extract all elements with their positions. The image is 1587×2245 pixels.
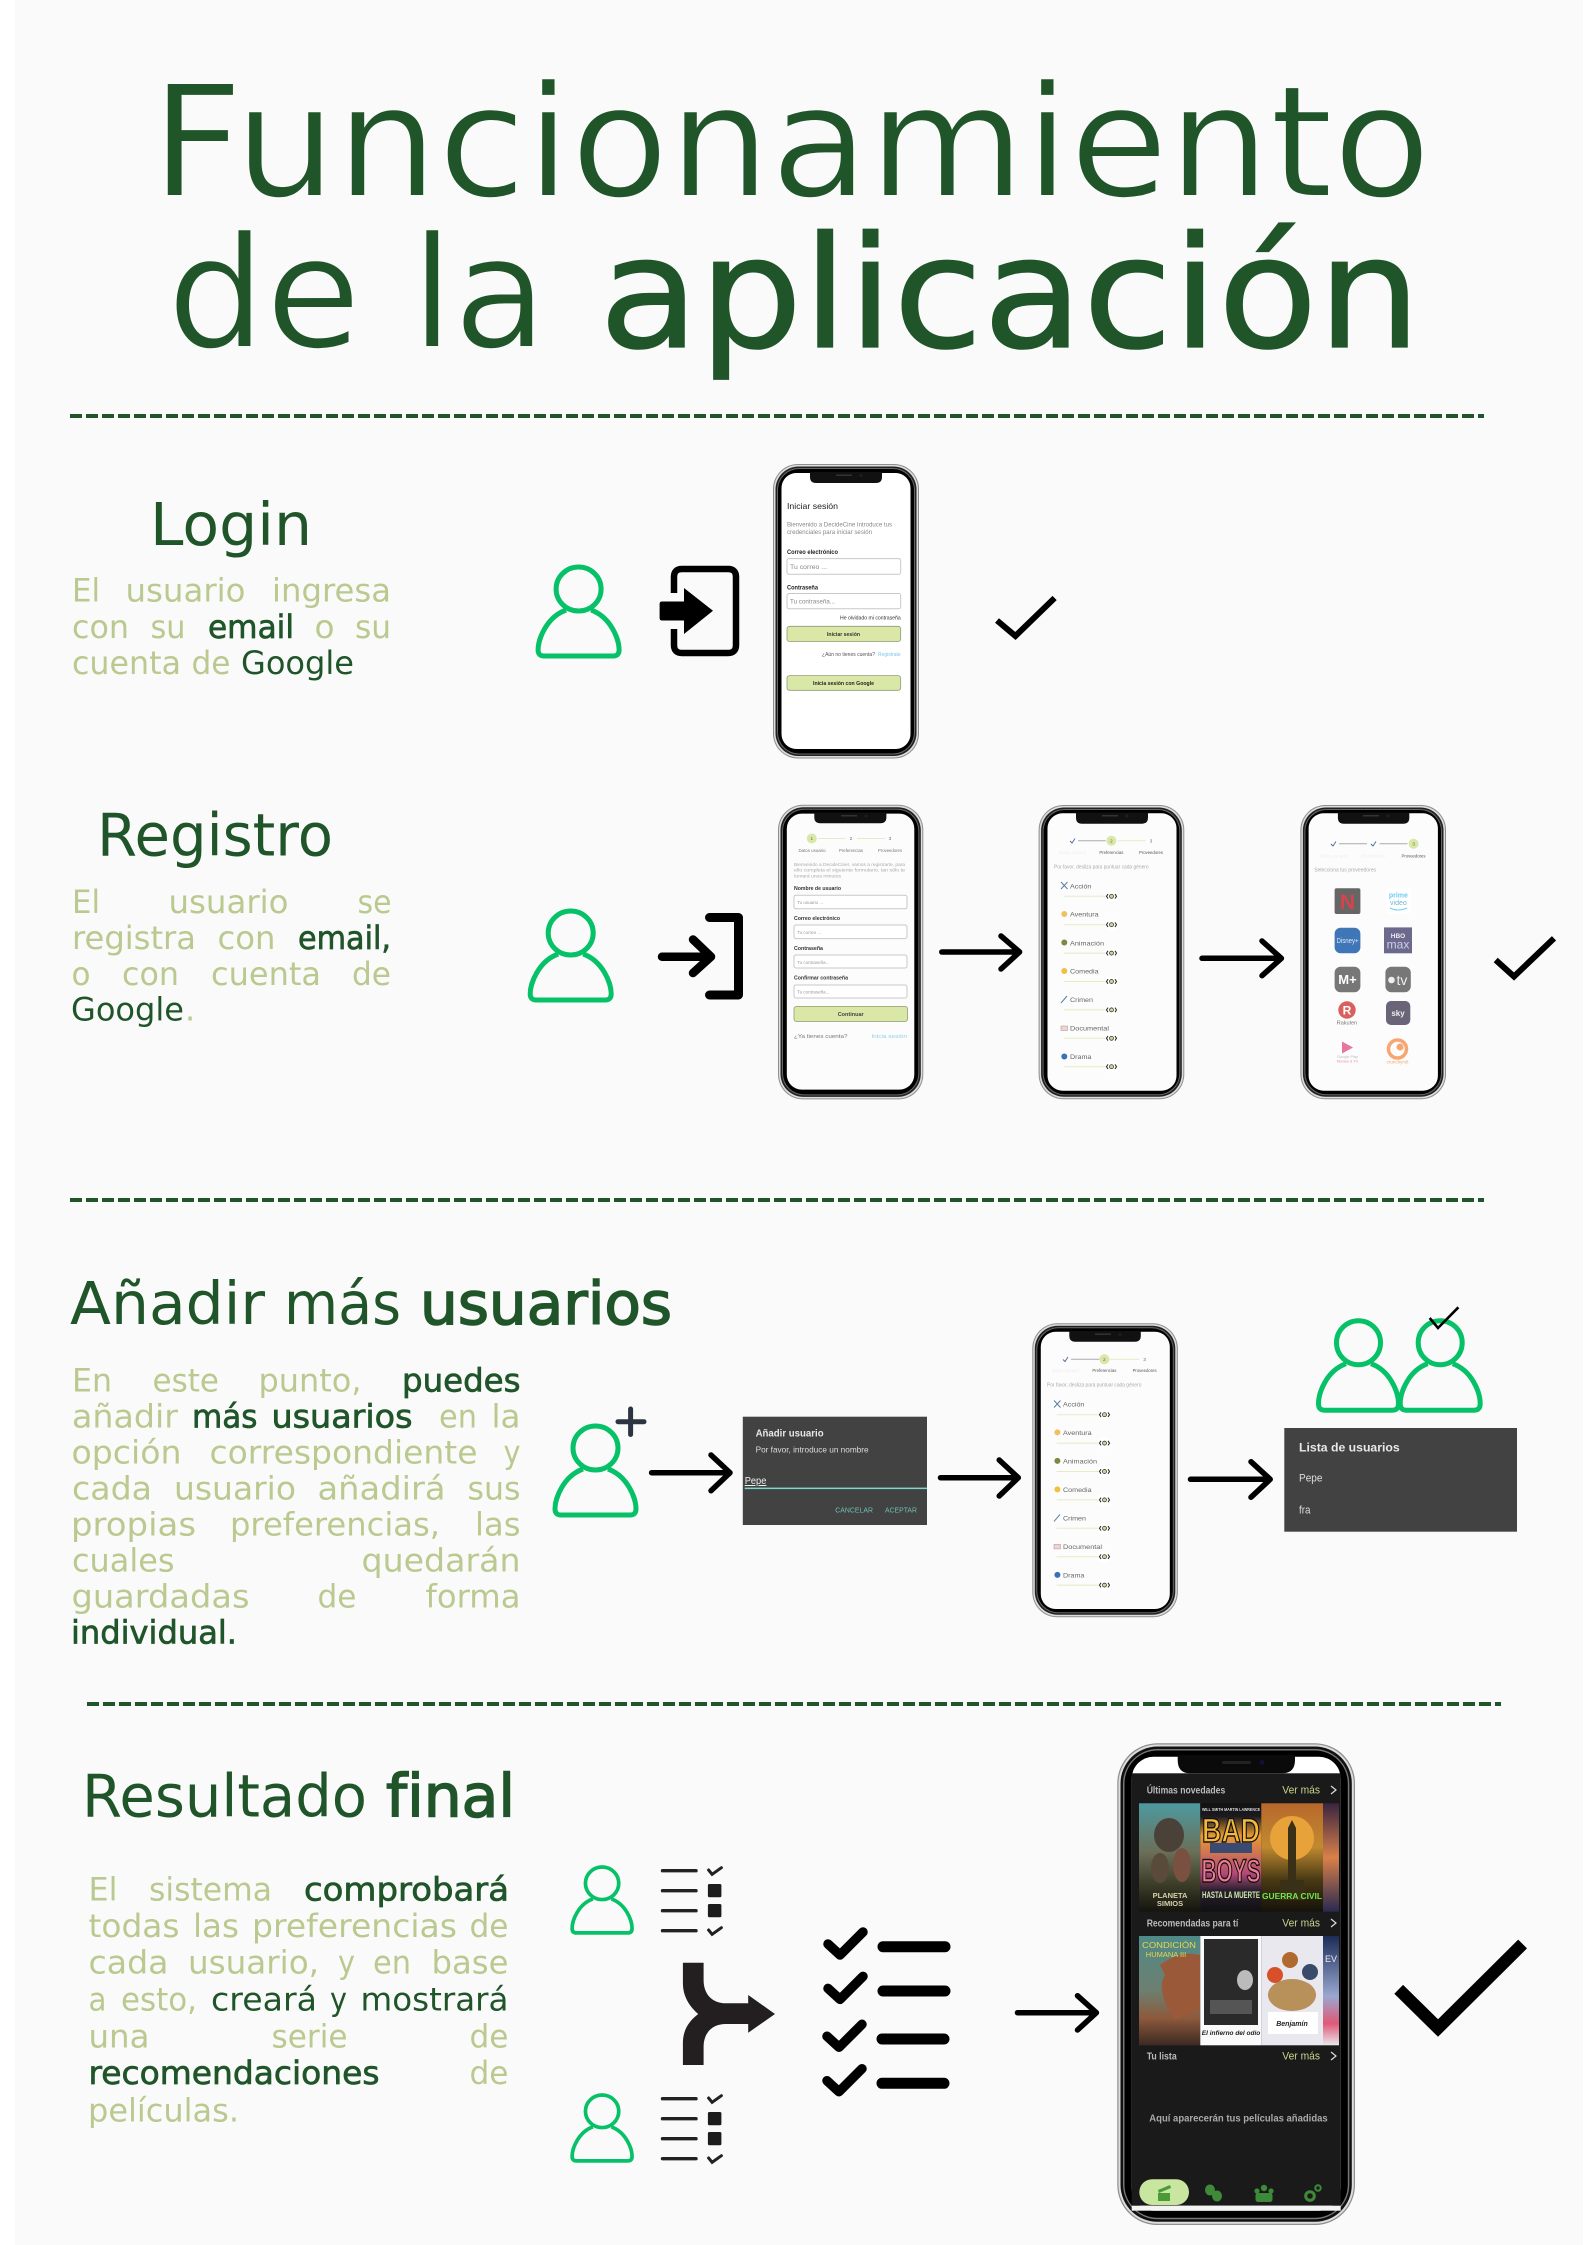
phone: preferencias: Datos usuario — [1059, 850, 1086, 855]
phone: proveedores: Google Play — [1337, 1055, 1358, 1059]
text block: login description — [72, 572, 391, 682]
text block: resultado description: creará — [211, 1980, 317, 2018]
phone: datos de usuario: Bienvenido a DecideCine!, vamos a registrarte, para — [794, 862, 906, 867]
text block: resultado description: recomendaciones — [88, 2054, 380, 2092]
text block: login description: su — [150, 608, 186, 646]
text block: resultado description: preferencias — [252, 1907, 457, 1945]
heading: añadir más usuarios: más — [284, 1269, 401, 1338]
section row: últimas novedades: Ver más — [1282, 2050, 1320, 2062]
text block: registro description: con — [122, 955, 179, 993]
panel: login — [72, 464, 1055, 758]
phone: proveedores: M+ — [1338, 972, 1357, 987]
text block: resultado description: a — [88, 1980, 106, 2018]
phone: datos de usuario: Tu correo ... — [797, 930, 821, 935]
phone: preferencias nuevo usuario: Documental — [1063, 1544, 1103, 1551]
phone: preferencias: 2 — [1110, 838, 1113, 843]
text block: login description: usuario — [126, 572, 246, 610]
phone: proveedores: Movies & TV — [1337, 1060, 1359, 1064]
text block: añadir description: correspondiente — [210, 1433, 478, 1471]
section row: últimas novedades: HUMANA III — [1146, 1950, 1186, 1959]
arrow — [940, 1460, 1018, 1496]
phone: preferencias: Comedia — [1070, 969, 1099, 976]
text block: añadir description: punto, — [258, 1362, 362, 1400]
phone: preferencias nuevo usuario: 3 — [1143, 1357, 1146, 1362]
title: Funcionamiento — [151, 52, 1431, 233]
phone: preferencias: Crimen — [1070, 997, 1093, 1004]
text block: registro description: cuenta — [211, 955, 321, 993]
phone: proveedores: N — [1340, 891, 1355, 914]
phone: login screen: Bienvenido a DecideCine Introduce tus — [787, 523, 892, 529]
heading: añadir más usuarios: usuarios — [420, 1269, 672, 1338]
phone: datos de usuario: ello completa el siguiente formulario, tan sólo te — [794, 868, 906, 873]
phone: preferencias: 3 — [1150, 838, 1153, 843]
icon: add user — [555, 1409, 644, 1515]
phone: datos de usuario: Tu contraseña... — [797, 960, 829, 965]
text block: añadir description: la — [492, 1398, 520, 1436]
panel: registro — [71, 800, 1554, 1099]
icon: user with preferences (bottom) — [572, 2095, 721, 2162]
text block: resultado description: todas — [88, 1907, 180, 1945]
phone: login screen: Contraseña — [787, 585, 819, 591]
icon: check — [1496, 938, 1554, 976]
panel: lista de usuarios: fra — [1299, 1504, 1311, 1516]
title: la — [411, 203, 547, 384]
heading: resultado final: final — [386, 1762, 515, 1830]
text block: registro description: se — [358, 883, 392, 921]
arrow — [652, 1455, 730, 1491]
phone: preferencias nuevo usuario: Por favor, desliza para puntuar cada género — [1047, 1383, 1142, 1389]
text block: añadir description: preferencias, — [230, 1505, 440, 1543]
icon: log in — [660, 569, 736, 653]
phone: proveedores: sky — [1391, 1009, 1405, 1018]
text block: añadir description: añadirá — [318, 1469, 446, 1507]
phone: datos de usuario: Datos usuario — [798, 848, 826, 853]
phone: datos de usuario: Nombre de usuario — [794, 886, 841, 892]
phone: datos de usuario: Tu contraseña... — [797, 989, 829, 994]
section row: últimas novedades: Últimas novedades — [1147, 1783, 1226, 1796]
text block: resultado description: usuario, — [188, 1944, 319, 1982]
phone: preferencias: Proveedores — [1139, 850, 1164, 855]
section row: últimas novedades: SIMIOS — [1157, 1899, 1183, 1908]
heading: login: Login — [150, 490, 312, 559]
text block: resultado description: serie — [272, 2018, 348, 2056]
text block: resultado description: en — [373, 1944, 411, 1982]
phone: proveedores: Preferencias — [1361, 853, 1386, 858]
phone: preferencias — [1039, 805, 1184, 1099]
phone: preferencias: Aventura — [1070, 912, 1099, 919]
text block: login description: ingresa — [272, 572, 391, 610]
phone: datos de usuario: 3 — [889, 836, 892, 841]
phone: datos de usuario: 2 — [850, 836, 853, 841]
section row: últimas novedades — [1132, 1783, 1341, 2211]
phone: preferencias: Animación — [1070, 940, 1104, 947]
phone: proveedores: Selecciona tus proveedores — [1314, 868, 1376, 874]
text block: añadir description: propias — [71, 1505, 196, 1543]
text block: registro description: email, — [298, 919, 391, 957]
phone: proveedores: Disney+ — [1336, 936, 1359, 945]
section row: últimas novedades: Benjamín — [1276, 2021, 1308, 2028]
text block: registro description: usuario — [168, 883, 288, 921]
title: de — [167, 203, 361, 384]
text block: resultado description: de — [470, 2054, 508, 2092]
panel: añadir más usuarios — [70, 1269, 1517, 1651]
text block: resultado description: y — [338, 1944, 355, 1982]
heading: añadir más usuarios: Añadir — [70, 1269, 266, 1338]
phone: preferencias nuevo usuario: Acción — [1063, 1402, 1085, 1409]
panel: lista de usuarios: Lista de usuarios — [1299, 1441, 1400, 1455]
title: aplicación — [599, 203, 1421, 384]
text block: registro description: . — [185, 991, 195, 1029]
phone: datos de usuario: Tu usuario ... — [797, 900, 823, 905]
phone: preferencias nuevo usuario — [1032, 1323, 1178, 1617]
dialog: añadir usuario: Pepe — [745, 1476, 767, 1487]
phone: preferencias nuevo usuario: 2 — [1103, 1357, 1106, 1362]
heading: registro: Registro — [97, 800, 333, 870]
text block: añadir description: sus — [468, 1469, 520, 1507]
section row: recomendadas: Recomendadas para tí — [1147, 1919, 1239, 1930]
text block: añadir description — [71, 1362, 520, 1651]
phone: proveedores: max — [1387, 938, 1409, 952]
section row: últimas novedades: PLANETA — [1153, 1891, 1188, 1900]
text block: registro description: o — [72, 955, 90, 993]
text block: añadir description: más — [192, 1398, 258, 1436]
phone: datos de usuario: Continuar — [838, 1012, 865, 1018]
phone: login screen: Tu contraseña... — [790, 599, 835, 606]
section row: últimas novedades: BOYS — [1202, 1853, 1260, 1889]
phone: datos de usuario: tomará unos minutos — [794, 874, 842, 879]
phone: proveedores: video — [1390, 900, 1407, 907]
phone: login screen: Iniciar sesión — [787, 501, 838, 511]
text block: añadir description: las — [475, 1505, 520, 1543]
arrow — [1190, 1462, 1270, 1497]
phone: datos de usuario: Correo electrónico — [794, 916, 840, 922]
text block: añadir description: este — [152, 1362, 219, 1400]
title — [151, 52, 1431, 384]
icon: user — [538, 567, 619, 656]
phone: preferencias: Drama — [1070, 1054, 1092, 1061]
phone: preferencias: Acción — [1070, 883, 1092, 890]
text block: login description: email — [208, 608, 294, 646]
section row: últimas novedades: Ver más — [1282, 1784, 1320, 1796]
phone: preferencias: Preferencias — [1099, 850, 1124, 855]
icon: user — [530, 911, 611, 1000]
section row: últimas novedades: Aquí aparecerán tus películas añadidas — [1149, 2114, 1328, 2125]
text block: resultado description: cada — [88, 1944, 168, 1982]
phone: proveedores: crunchyroll — [1387, 1060, 1408, 1065]
section row: últimas novedades: CONDICIÓN — [1142, 1941, 1196, 1950]
text block: resultado description: las — [193, 1907, 239, 1945]
dialog: añadir usuario: ACEPTAR — [885, 1506, 918, 1515]
phone: login screen: ¿Aún no tienes cuenta? — [822, 652, 875, 658]
arrow — [1202, 941, 1281, 976]
tab bar — [1139, 2179, 1321, 2205]
phone: login screen: Correo electrónico — [787, 550, 838, 556]
text block: resultado description: de — [470, 2018, 508, 2056]
section row: últimas novedades: El infierno del odio — [1202, 2030, 1260, 2037]
phone: preferencias nuevo usuario: Crimen — [1063, 1515, 1086, 1522]
phone: proveedores: Proveedores — [1402, 853, 1426, 858]
phone: proveedores: 3 — [1412, 841, 1415, 846]
phone: proveedores: R — [1343, 1004, 1352, 1018]
text block: login description: de — [192, 644, 230, 682]
icon: user with preferences (top) — [572, 1867, 721, 1934]
text block: resultado description: sistema — [149, 1870, 272, 1908]
text block: añadir description: individual. — [71, 1613, 237, 1651]
text block: añadir description: guardadas — [72, 1577, 250, 1615]
dialog: añadir usuario: Por favor, introduce un nombre — [756, 1445, 869, 1455]
icon: merge arrow — [683, 1963, 775, 2065]
text block: añadir description: en — [439, 1398, 477, 1436]
section row: tu lista: Tu lista — [1147, 2051, 1177, 2062]
text block: registro description: registra — [72, 919, 196, 957]
arrow — [1018, 1996, 1096, 2030]
phone: datos de usuario: 1 — [811, 836, 814, 841]
text block: resultado description: una — [88, 2018, 150, 2056]
text block: login description: Google — [241, 644, 354, 682]
icon: big check — [1399, 1944, 1523, 2028]
phone: datos de usuario — [778, 805, 923, 1099]
text block: añadir description: cuales — [72, 1541, 174, 1579]
phone: login screen — [773, 464, 919, 758]
panel: lista de usuarios — [1284, 1428, 1517, 1532]
text block: añadir description: quedarán — [362, 1541, 520, 1579]
text block: resultado description: películas. — [88, 2092, 239, 2130]
phone: datos de usuario: Proveedores — [878, 848, 903, 853]
text block: resultado description: comprobará — [304, 1870, 509, 1908]
section row: últimas novedades: HASTA LA MUERTE — [1202, 1890, 1260, 1900]
phone: proveedores: prime — [1389, 892, 1408, 900]
text block: resultado description: esto, — [121, 1980, 197, 2018]
text block: login description: o — [314, 608, 334, 646]
phone: login screen: He olvidado mi contraseña — [840, 616, 901, 622]
panel: lista de usuarios: Pepe — [1299, 1473, 1322, 1485]
phone: final home screen — [1117, 1743, 1523, 2225]
phone: preferencias nuevo usuario: Aventura — [1063, 1430, 1092, 1437]
text block: resultado description: mostrará — [360, 1980, 508, 2018]
phone: login screen: credenciales para iniciar sesión — [787, 530, 872, 536]
text block: login description: cuenta — [72, 644, 181, 682]
text block: añadir description: opción — [72, 1433, 182, 1471]
phone: datos de usuario: Confirmar contraseña — [794, 976, 848, 982]
text block: resultado description: El — [88, 1870, 118, 1908]
phone: proveedores: Datos usuario — [1320, 853, 1347, 858]
phone: datos de usuario: Contraseña — [794, 946, 823, 952]
phone: preferencias nuevo usuario: Datos usuario — [1052, 1368, 1079, 1373]
phone: proveedores: tv — [1397, 972, 1407, 988]
phone: datos de usuario: ¿Ya tienes cuenta? — [794, 1034, 848, 1040]
section row: últimas novedades: WILL SMITH MARTIN LAWRENCE — [1202, 1807, 1260, 1812]
text block: añadir description: puedes — [402, 1362, 520, 1400]
text block: login description: con — [72, 608, 129, 646]
text block: añadir description: En — [72, 1362, 112, 1400]
icon: combined checklist — [827, 1932, 945, 2092]
text block: añadir description: de — [318, 1577, 356, 1615]
text block: registro description: de — [352, 955, 391, 993]
text block: registro description: Google — [71, 991, 184, 1029]
text block: añadir description: y — [504, 1433, 520, 1471]
text block: añadir description: usuario — [174, 1469, 296, 1507]
dialog: añadir usuario: Añadir usuario — [756, 1428, 824, 1440]
text block: añadir description: usuarios — [272, 1398, 412, 1436]
phone: preferencias nuevo usuario: Preferencias — [1092, 1368, 1117, 1373]
phone: proveedores: HBO — [1391, 933, 1405, 940]
phone: preferencias nuevo usuario: Drama — [1063, 1572, 1085, 1579]
heading: añadir más usuarios — [70, 1269, 672, 1338]
phone: preferencias nuevo usuario: Comedia — [1063, 1487, 1092, 1494]
phone: login screen: Iniciar sesión — [827, 632, 861, 638]
text block: registro description: El — [72, 883, 100, 921]
dialog: añadir usuario — [743, 1417, 927, 1525]
text block: resultado description: y — [330, 1980, 347, 2018]
phone: preferencias nuevo usuario: Animación — [1063, 1459, 1097, 1466]
text block: resultado description: de — [470, 1907, 508, 1945]
phone: datos de usuario: Inicia sesión — [871, 1034, 907, 1040]
phone: proveedores — [1300, 805, 1446, 1099]
icon: sign up — [662, 918, 738, 995]
icon: two users — [1318, 1307, 1480, 1410]
phone: preferencias: Documental — [1070, 1026, 1110, 1033]
phone: login screen: Inicia sesión con Google — [813, 681, 874, 687]
text block: login description: El — [72, 572, 100, 610]
phone: preferencias: Por favor, desliza para puntuar cada género — [1054, 864, 1149, 870]
text block: login description: su — [355, 608, 391, 646]
text block: añadir description: cada — [72, 1469, 152, 1507]
text block: registro description: con — [218, 919, 276, 957]
panel: resultado final — [82, 1743, 1523, 2225]
arrow — [942, 936, 1020, 969]
phone: proveedores: Rakuten — [1337, 1021, 1357, 1027]
section row: últimas novedades: GUERRA CIVIL — [1262, 1892, 1322, 1901]
icon: check — [997, 598, 1055, 636]
phone: preferencias nuevo usuario: Proveedores — [1133, 1368, 1157, 1373]
phone: datos de usuario: Preferencias — [839, 848, 864, 853]
text block: añadir description: añadir — [72, 1398, 179, 1436]
text block: resultado description: base — [432, 1944, 508, 1982]
heading: resultado final: Resultado — [82, 1762, 367, 1830]
phone: login screen: Tu correo ... — [790, 564, 827, 571]
text block: añadir description: forma — [426, 1577, 520, 1615]
section row: últimas novedades: Ver más — [1282, 1918, 1320, 1930]
dialog: añadir usuario: CANCELAR — [835, 1506, 874, 1515]
heading: resultado final — [82, 1762, 515, 1830]
text block: registro description — [71, 883, 392, 1029]
section row: últimas novedades: EV — [1325, 1954, 1337, 1964]
text block: resultado description — [88, 1870, 509, 2130]
section row: últimas novedades: BAD — [1202, 1812, 1260, 1850]
phone: login screen: Registrate — [878, 652, 901, 658]
